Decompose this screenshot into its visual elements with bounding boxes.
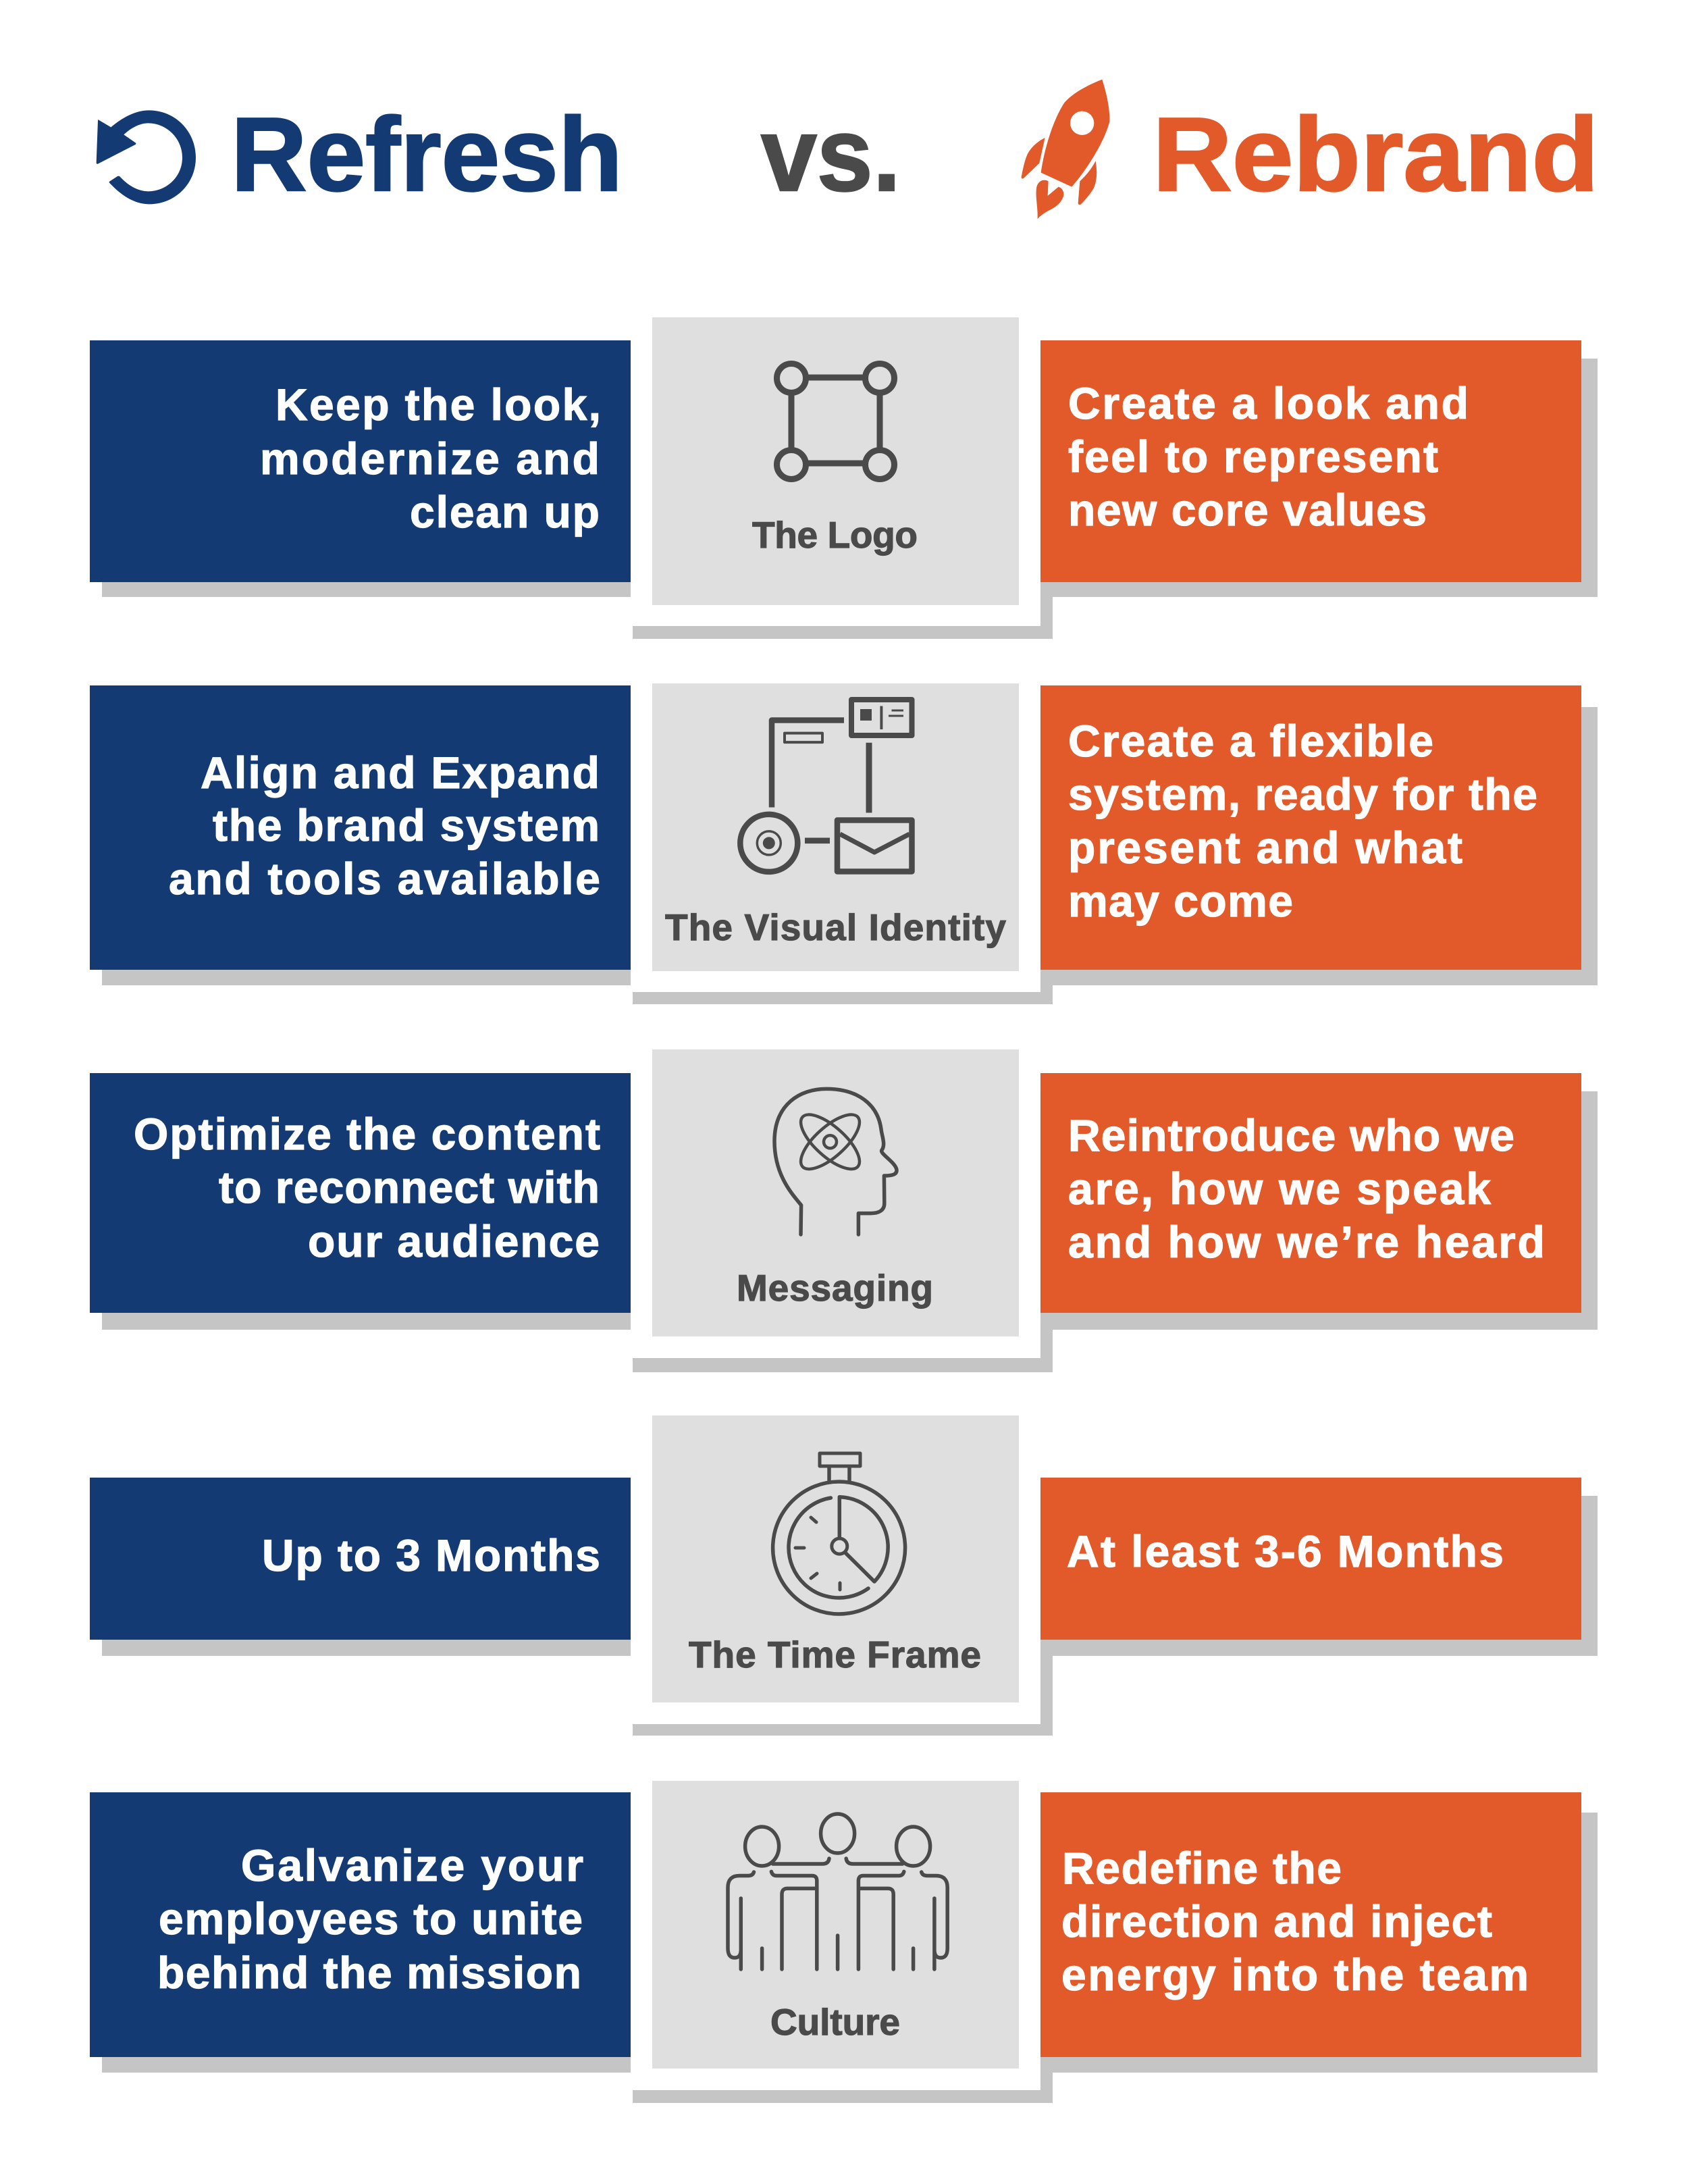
- panel: rebrand, culture: Redefine the: [1062, 1843, 1342, 1893]
- panel: refresh, messaging: [90, 1073, 631, 1330]
- panel: rebrand, visual identity: [633, 685, 1598, 1004]
- panel: refresh, logo: clean up: [410, 487, 600, 537]
- panel: refresh, time frame: Up to 3 Months: [262, 1530, 600, 1580]
- panel: time frame label card: The Time Frame: [689, 1634, 981, 1675]
- icon: rocket: [1022, 80, 1109, 219]
- panel: time frame label card: [652, 1415, 1019, 1702]
- heading: Refresh: Refresh: [231, 96, 623, 213]
- panel: refresh, culture: [90, 1792, 631, 2073]
- panel: rebrand, messaging: Reintroduce who we: [1068, 1110, 1514, 1160]
- icon: three people team: [728, 1814, 947, 1969]
- panel: rebrand, time frame: At least 3-6 Months: [1067, 1526, 1504, 1576]
- panel: the logo label card: [652, 317, 1019, 605]
- panel: refresh, messaging: Optimize the content: [134, 1109, 600, 1159]
- panel: rebrand, messaging: and how we’re heard: [1068, 1217, 1545, 1267]
- heading: Rebrand: Rebrand: [1153, 96, 1599, 213]
- row 4: the time frame: [90, 1415, 1598, 1736]
- panel: refresh, visual identity: Align and Expand: [201, 748, 600, 798]
- panel: rebrand, visual identity: may come: [1068, 876, 1293, 926]
- panel: refresh, logo: Keep the look,: [275, 380, 601, 430]
- panel: rebrand, culture: energy into the team: [1061, 1950, 1529, 2000]
- icon: logo anchor square: [776, 363, 894, 479]
- panel: refresh, logo: [90, 340, 631, 597]
- panel: rebrand, logo: [633, 340, 1598, 639]
- panel: refresh, culture: Galvanize your: [241, 1840, 583, 1890]
- header: [97, 80, 1599, 219]
- icon: stopwatch: [773, 1453, 905, 1614]
- panel: rebrand, visual identity: system, ready for the: [1068, 769, 1537, 819]
- panel: rebrand, messaging: [633, 1073, 1598, 1372]
- panel: messaging label card: Messaging: [737, 1267, 933, 1309]
- panel: rebrand, culture: direction and inject: [1061, 1896, 1492, 1946]
- icon: refresh arrow: [97, 110, 196, 204]
- icon: brand system diagram: [740, 700, 912, 872]
- panel: culture label card: [652, 1781, 1019, 2069]
- panel: refresh, time frame: [90, 1478, 631, 1656]
- panel: rebrand, logo: feel to represent: [1068, 432, 1438, 482]
- panel: refresh, culture: employees to unite: [159, 1894, 583, 1944]
- panel: refresh, messaging: to reconnect with: [219, 1162, 600, 1212]
- panel: rebrand, visual identity: present and what: [1068, 823, 1462, 873]
- row 3: messaging: [90, 1049, 1598, 1372]
- icon: head with atom: [774, 1089, 897, 1234]
- panel: rebrand, culture: [633, 1792, 1598, 2103]
- panel: refresh, messaging: our audience: [308, 1216, 600, 1266]
- panel: refresh, visual identity: [90, 685, 631, 985]
- panel: refresh, logo: modernize and: [260, 434, 600, 484]
- panel: culture label card: Culture: [770, 2001, 900, 2043]
- row 1: the logo: [90, 317, 1598, 639]
- panel: refresh, visual identity: the brand system: [213, 800, 600, 850]
- panel: refresh, culture: behind the mission: [157, 1948, 581, 1998]
- panel: rebrand, logo: new core values: [1068, 485, 1427, 535]
- panel: rebrand, time frame: [633, 1478, 1598, 1736]
- panel: messaging label card: [652, 1049, 1019, 1336]
- panel: refresh, visual identity: and tools available: [169, 854, 600, 904]
- panel: the logo label card: The Logo: [752, 514, 918, 556]
- panel: rebrand, logo: Create a look and: [1068, 378, 1469, 428]
- row 5: culture: [90, 1781, 1598, 2103]
- panel: visual identity label card: The Visual Identity: [665, 906, 1006, 948]
- panel: rebrand, messaging: are, how we speak: [1068, 1164, 1491, 1214]
- heading: vs.: vs.: [761, 96, 901, 213]
- panel: rebrand, visual identity: Create a flexible: [1068, 716, 1433, 766]
- row 2: the visual identity: [90, 683, 1598, 1004]
- panel: visual identity label card: [652, 683, 1019, 971]
